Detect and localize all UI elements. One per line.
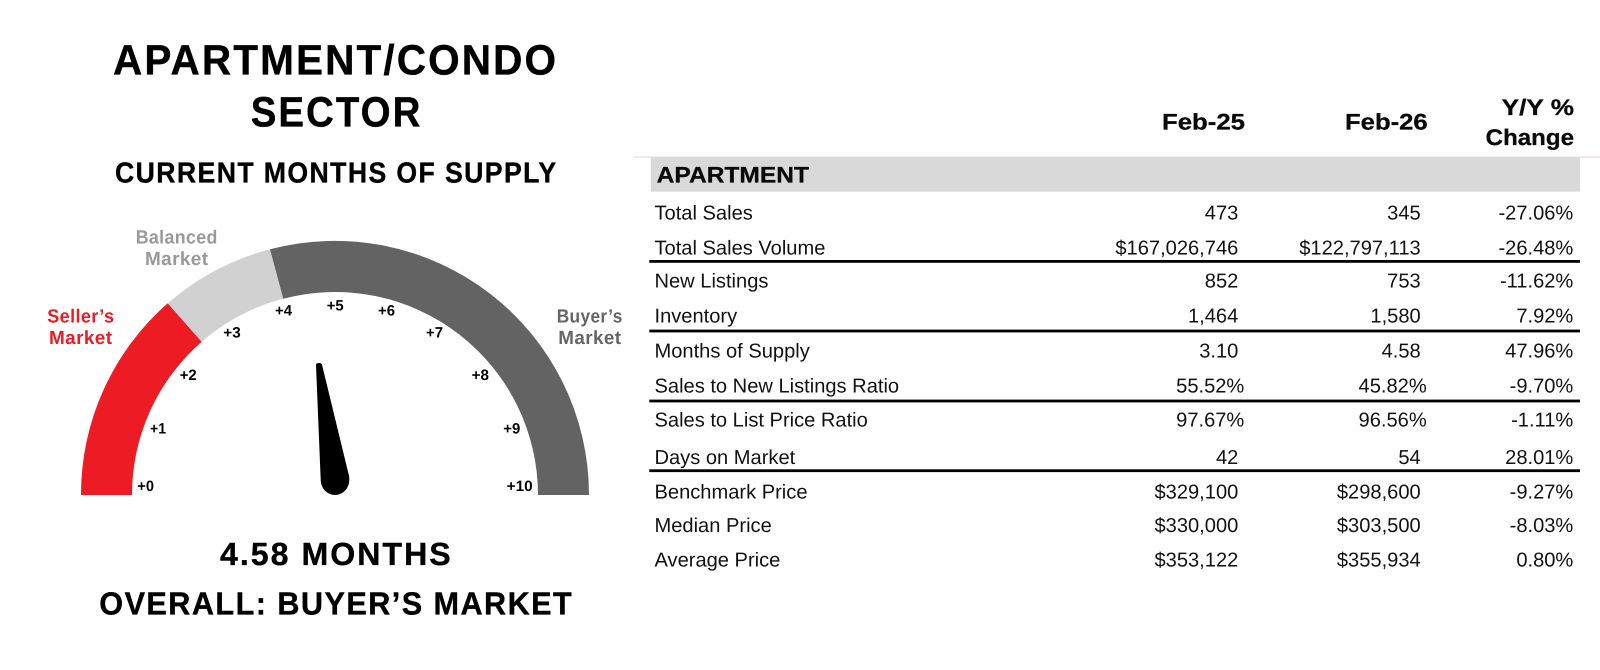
title xyxy=(113,37,558,137)
row group: supply: 47.96% xyxy=(1505,340,1573,362)
row group: market pace: 28.01% xyxy=(1505,447,1573,469)
row group: market pace: Days on Market xyxy=(654,447,796,469)
row group: prices: $353,122 xyxy=(1154,550,1238,572)
row group: sales: -26.48% xyxy=(1498,237,1573,259)
scale labels: +4 xyxy=(275,303,293,320)
gauge segment: balanced market xyxy=(168,249,283,342)
row group: market pace xyxy=(654,410,1573,469)
scale labels: +10 xyxy=(507,478,533,495)
title: SECTOR xyxy=(251,90,422,137)
row group: prices xyxy=(654,482,1573,572)
row group: prices: Benchmark Price xyxy=(654,482,808,504)
row group: prices: $298,600 xyxy=(1337,482,1421,504)
row group: prices: $303,500 xyxy=(1337,515,1421,537)
scale labels xyxy=(137,298,533,495)
row group: supply xyxy=(654,340,1573,397)
row group: supply: 3.10 xyxy=(1199,340,1238,362)
scale labels: +5 xyxy=(327,298,344,315)
label: buyer's market xyxy=(557,307,623,349)
row group: prices: $330,000 xyxy=(1154,515,1238,537)
data table xyxy=(649,95,1580,572)
row group: supply: 55.52% xyxy=(1176,375,1244,397)
row group: sales: 473 xyxy=(1205,202,1238,224)
title: APARTMENT/CONDO xyxy=(113,37,558,84)
gauge segment: seller's market xyxy=(81,303,202,495)
row group: supply: Months of Supply xyxy=(654,340,810,362)
section band: apartment: APARTMENT xyxy=(657,162,809,187)
scale labels: +9 xyxy=(503,420,520,437)
row group: sales: $122,797,113 xyxy=(1299,237,1421,259)
row group: market pace: Sales to List Price Ratio xyxy=(654,410,868,432)
label: buyer's market: Buyer’s xyxy=(557,307,623,328)
label: balanced market: Balanced xyxy=(136,227,218,248)
row group: listings: Inventory xyxy=(654,305,737,327)
scale labels: +3 xyxy=(223,324,241,341)
row group: sales: $167,026,746 xyxy=(1115,237,1238,259)
row group: prices: -8.03% xyxy=(1510,515,1573,537)
scale labels: +1 xyxy=(150,420,166,437)
label: balanced market xyxy=(136,227,218,270)
overall verdict: OVERALL: BUYER’S MARKET xyxy=(99,585,573,621)
row group: prices: $329,100 xyxy=(1154,482,1238,504)
row group: prices: $355,934 xyxy=(1337,550,1421,572)
row group: supply: -9.70% xyxy=(1510,375,1573,397)
column headers: Y/Y % xyxy=(1502,95,1574,120)
label: seller's market xyxy=(47,307,114,349)
label: buyer's market: Market xyxy=(558,328,622,349)
row group: supply: 45.82% xyxy=(1359,375,1427,397)
row group: supply: 4.58 xyxy=(1382,340,1421,362)
row group: market pace: 54 xyxy=(1398,447,1421,469)
row group: market pace: 42 xyxy=(1216,447,1238,469)
gauge chart xyxy=(47,227,623,495)
scale labels: +6 xyxy=(378,303,395,320)
row group: listings: -11.62% xyxy=(1500,270,1573,292)
row group: sales: Total Sales Volume xyxy=(654,237,825,259)
row group: prices: Average Price xyxy=(654,550,780,572)
row group: listings: 1,464 xyxy=(1188,305,1238,327)
row group: sales: -27.06% xyxy=(1498,202,1573,224)
scale labels: +8 xyxy=(472,367,489,384)
scale labels: +7 xyxy=(426,324,443,341)
row group: market pace: 96.56% xyxy=(1359,410,1427,432)
scale labels: +2 xyxy=(180,367,197,384)
row group: prices: Median Price xyxy=(654,515,772,537)
row group: listings xyxy=(654,270,1573,327)
row group: listings: New Listings xyxy=(654,270,768,292)
row group: listings: 7.92% xyxy=(1516,305,1573,327)
subtitle: current months of supply: CURRENT MONTHS OF SUPPLY xyxy=(115,158,558,190)
label: balanced market: Market xyxy=(145,249,209,270)
column headers xyxy=(1162,95,1574,150)
needle xyxy=(316,363,349,495)
column headers: Feb-26 xyxy=(1345,109,1428,134)
section band: apartment xyxy=(651,157,1580,192)
row group: listings: 1,580 xyxy=(1370,305,1421,327)
row group: prices: -9.27% xyxy=(1510,482,1573,504)
row group: listings: 852 xyxy=(1205,270,1238,292)
label: seller's market: Market xyxy=(49,328,113,349)
gauge segment: buyer's market xyxy=(270,241,589,495)
row group: supply: Sales to New Listings Ratio xyxy=(654,375,899,397)
row group: sales: Total Sales xyxy=(654,202,753,224)
gauge reading: 4.58 months: 4.58 MONTHS xyxy=(220,536,453,572)
row group: market pace: -1.11% xyxy=(1511,410,1573,432)
row group: prices: 0.80% xyxy=(1516,550,1573,572)
label: seller's market: Seller’s xyxy=(47,307,114,328)
column headers: Feb-25 xyxy=(1162,109,1245,134)
scale labels: +0 xyxy=(137,478,154,495)
row group: listings: 753 xyxy=(1387,270,1421,292)
row group: sales xyxy=(654,202,1573,259)
faint rule beside table xyxy=(633,156,650,158)
row group: market pace: 97.67% xyxy=(1176,410,1244,432)
column headers: Change xyxy=(1486,125,1574,150)
row group: sales: 345 xyxy=(1387,202,1421,224)
